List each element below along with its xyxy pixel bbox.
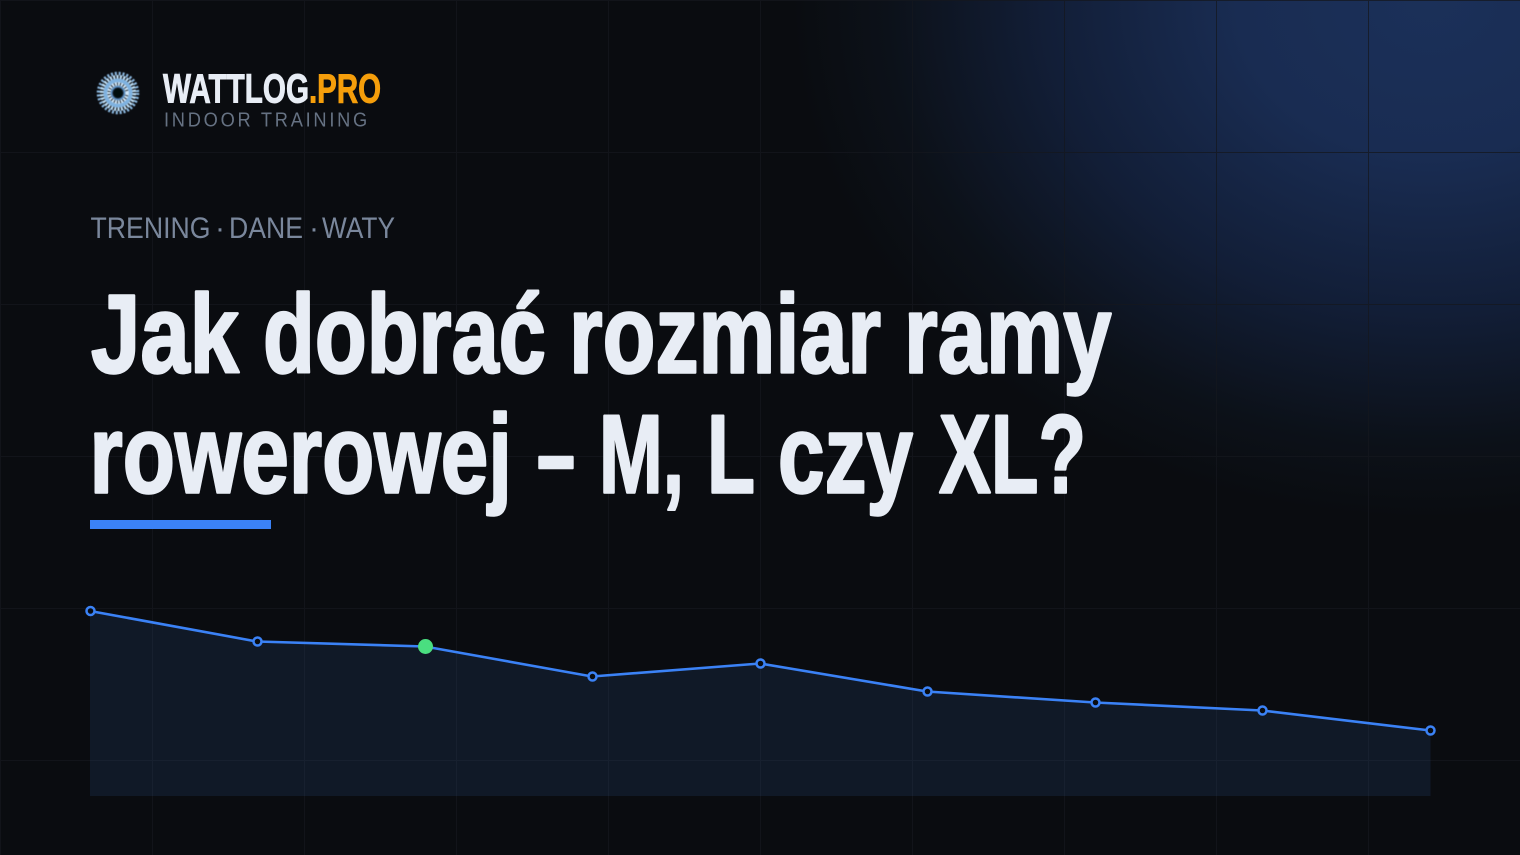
title line 2: L xyxy=(707,392,755,516)
title line 2: rowerowej xyxy=(90,392,512,516)
brand suffix: .PRO xyxy=(309,66,381,112)
data points xyxy=(86,607,1434,734)
eyebrow: · xyxy=(215,212,225,245)
brand name: WATTLOG xyxy=(163,66,309,112)
title line 1 xyxy=(91,272,1112,396)
title line 1: dobrać xyxy=(263,272,546,396)
title line 1: Jak xyxy=(91,272,239,396)
title line 2 xyxy=(90,392,1086,516)
title underline accent xyxy=(90,520,271,529)
line chart xyxy=(86,607,1434,796)
eyebrow: WATY xyxy=(322,212,395,245)
title line 1: ramy xyxy=(904,272,1112,396)
chart line xyxy=(90,611,1430,730)
title line 2: XL? xyxy=(939,392,1086,516)
logo xyxy=(98,66,381,132)
tagline: INDOOR TRAINING xyxy=(164,110,370,132)
eyebrow: DANE xyxy=(229,212,303,245)
title line 2: – xyxy=(537,392,575,516)
eyebrow xyxy=(90,212,395,245)
title line 2: czy xyxy=(778,392,913,516)
eyebrow: TRENING xyxy=(90,212,210,245)
highlighted data point xyxy=(418,639,433,654)
chart area fill xyxy=(90,611,1430,796)
title line 1: rozmiar xyxy=(569,272,881,396)
title xyxy=(90,272,1112,516)
title line 2: M, xyxy=(599,392,684,516)
eyebrow: · xyxy=(309,212,319,245)
icon: cassette gear xyxy=(98,74,138,112)
